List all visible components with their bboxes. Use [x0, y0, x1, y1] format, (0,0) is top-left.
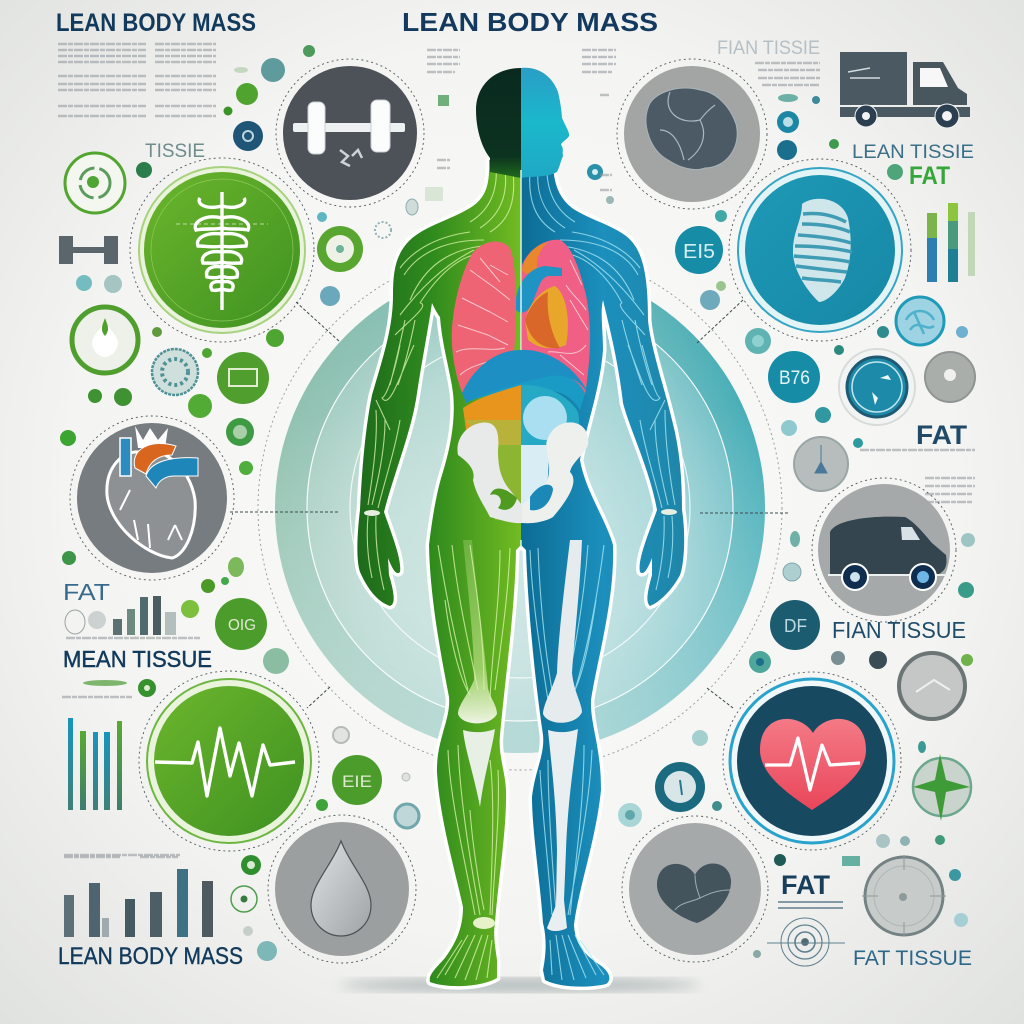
label: fian tissie top right: FIAN TISSIE: [717, 38, 820, 59]
icon: heart: [107, 426, 198, 558]
label: fat lower right: FAT: [781, 870, 830, 900]
icon: grey dial: [862, 855, 946, 936]
badges: teal labels: [675, 226, 820, 650]
icon: green target ring: [65, 153, 125, 213]
badge: green DIG: [215, 598, 267, 650]
panel: water drop circle: [268, 815, 416, 963]
panel: barbell circle: [276, 59, 424, 207]
icon: barbell: [293, 100, 405, 166]
bar chart: vertical bars right: [927, 203, 975, 282]
icon: grey ring right: [899, 653, 965, 719]
icon: blue ring with halo: [839, 349, 915, 425]
panel: grey heart circle: [622, 816, 768, 962]
label: lean body mass bottom: LEAN BODY MASS: [58, 943, 243, 970]
icon: green star disc: [913, 754, 971, 821]
title: LEAN BODY MASS: [402, 7, 658, 37]
icon: ring target lower: [231, 886, 257, 912]
diaphragm: [462, 350, 588, 403]
icon: drop: [311, 841, 371, 936]
icon: delivery truck: [840, 52, 970, 128]
floor shadow: [340, 978, 700, 992]
badge: green card icon: [217, 352, 269, 404]
label: lean tissie: LEAN TISSIE: [852, 142, 974, 163]
icon: green ring with tooth: [72, 307, 138, 373]
badge: green EIE: [332, 755, 382, 805]
label: fat tissue: FAT TISSUE: [853, 947, 972, 970]
icon: blue swirl circle: [896, 297, 944, 345]
heart organ: [516, 242, 568, 348]
blue half of body: [521, 160, 684, 987]
text blocks: behind head: [427, 50, 616, 190]
icon: dark heart: [657, 864, 731, 923]
white body halo: [357, 160, 684, 987]
label: fat left: FAT: [63, 579, 110, 605]
bar chart: lean body mass: [64, 857, 213, 937]
badges: teal labels: EI5: [683, 241, 715, 263]
icon: tissue ribcage: [793, 199, 852, 302]
green half of body: [357, 160, 521, 986]
head: dark side: [476, 68, 521, 178]
leg bones: tibia right: [547, 729, 578, 931]
label: tissie: TISSIE: [145, 141, 205, 162]
label: fian tissue: FIAN TISSUE: [832, 617, 966, 643]
text block: under fat: [860, 450, 975, 502]
text block: top left: [58, 44, 216, 116]
icon: heart pulse: [765, 738, 860, 790]
blue muscle lines: [530, 165, 675, 980]
centre line: [520, 170, 522, 548]
lungs: [452, 240, 590, 395]
icon: ribcage: [176, 192, 268, 310]
badge: green EIE: EIE: [342, 772, 372, 791]
panel: blue ribcage circle: [729, 159, 911, 341]
ankle: left: [473, 917, 495, 929]
icon: concentric target: [767, 902, 845, 966]
panel: heart pulse circle: [723, 672, 901, 850]
concentric backdrop disc: [230, 246, 790, 770]
small icons: upper left: [60, 45, 363, 475]
label: mean tissue: MEAN TISSUE: [63, 646, 212, 672]
panel: van circle: [812, 478, 956, 622]
leg bones: femur right: [543, 540, 582, 723]
green muscle lines: [367, 165, 514, 980]
small icons: lower right: [618, 531, 975, 958]
human figure: [357, 68, 684, 987]
icon: grey clock: [794, 437, 848, 491]
head: teal face: [521, 68, 569, 178]
icon: teal hatched circle: [152, 349, 198, 395]
panel: anatomical heart circle: [70, 416, 234, 580]
icon: van: [830, 517, 947, 576]
badge: green DIG: OIG: [228, 617, 256, 634]
panel: green pulse circle: [139, 671, 319, 851]
badges: teal labels: B76: [779, 368, 810, 389]
bar chart: small grey: [65, 596, 200, 638]
pelvis: [457, 422, 588, 523]
icon: teal face circle: [655, 762, 705, 812]
leg bones: tibia left: [463, 729, 495, 807]
label: fat green: FAT: [909, 162, 950, 190]
text block: top right: [755, 63, 820, 85]
wrists: [364, 509, 677, 516]
icon: lung blob: [646, 88, 737, 170]
label: fat right: FAT: [916, 420, 968, 450]
small icons: upper right: [375, 94, 968, 448]
icon: pulse line: [155, 728, 295, 796]
heading: top left: LEAN BODY MASS: [56, 9, 256, 37]
badges: teal labels: DF: [784, 616, 807, 636]
panel: green ribcage circle: [130, 158, 314, 342]
icon: grey disc right: [925, 352, 975, 402]
icon: dumbbell: [59, 236, 118, 264]
abdomen organs: [463, 385, 579, 520]
leg bones: femur left: [458, 540, 497, 723]
panel: lung tissue circle: [617, 59, 767, 209]
bar chart: blue green bars: [62, 697, 180, 855]
icon: red heart: [760, 719, 866, 810]
small icons: lower left: [62, 551, 419, 961]
